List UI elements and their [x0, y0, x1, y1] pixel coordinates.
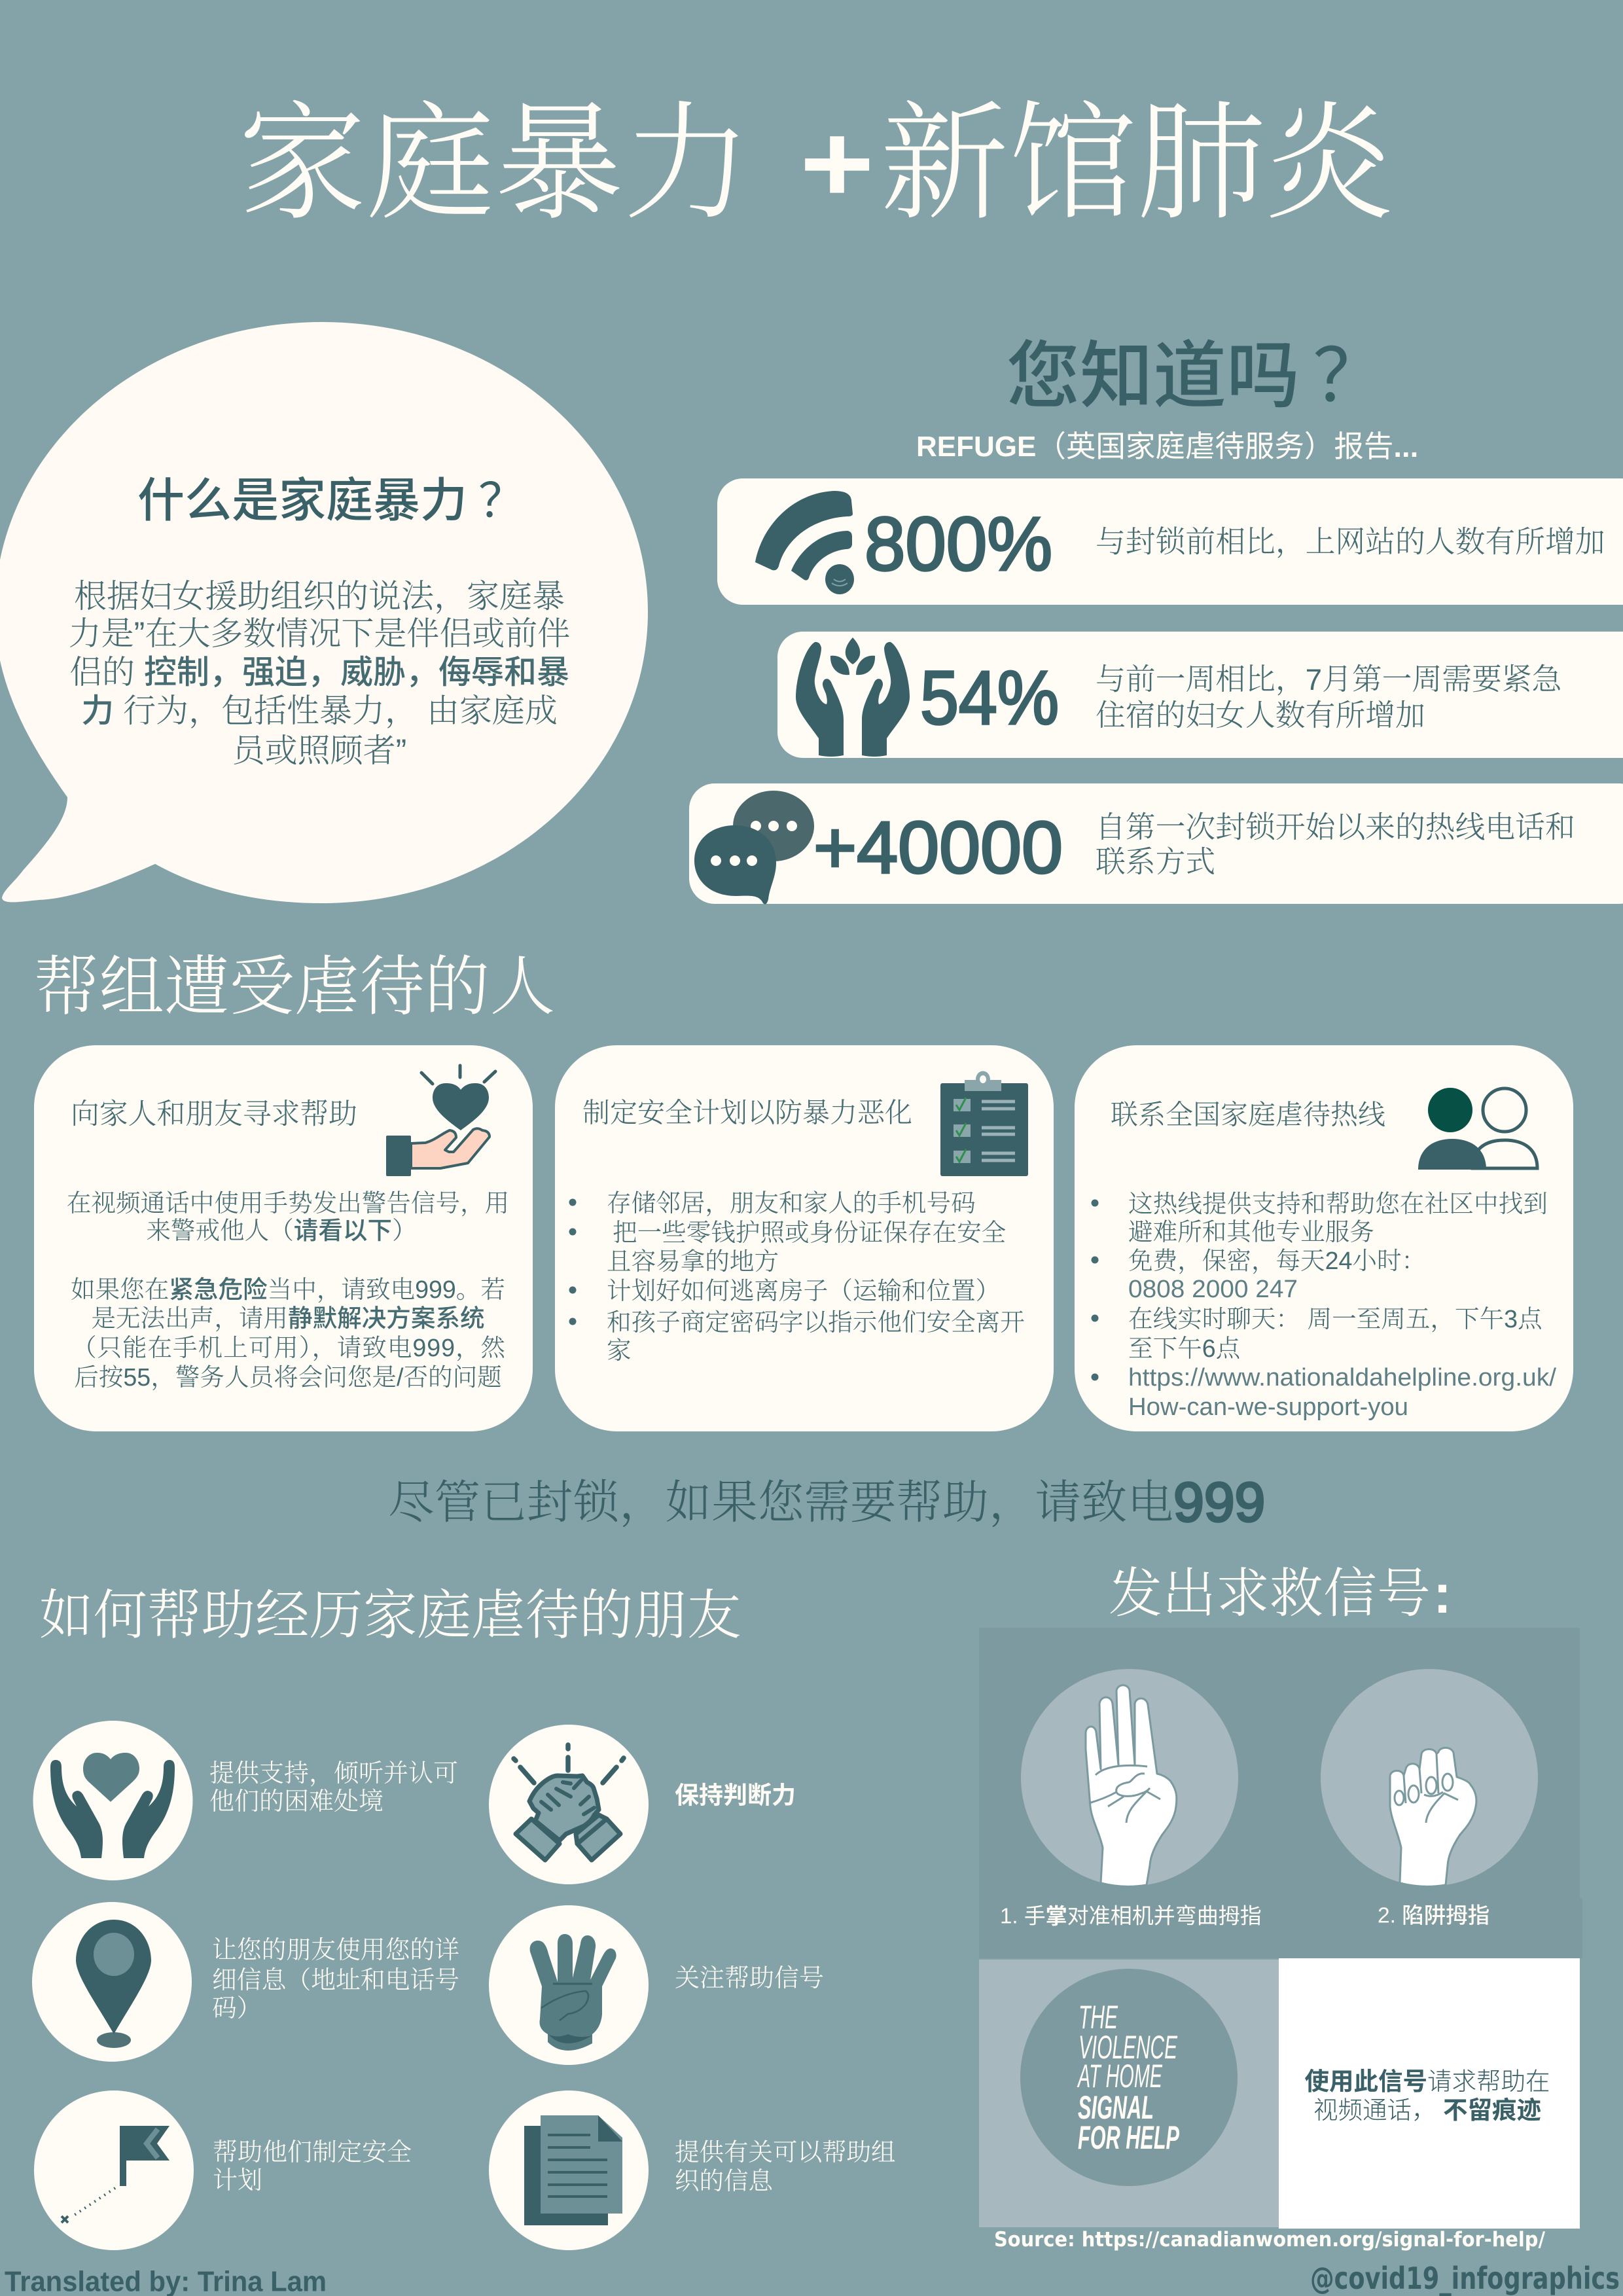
card body: 如果您在紧急危险当中，请致电999。若: [71, 1276, 505, 1304]
icon: location pin: [32, 1902, 192, 2062]
text: 帮助他们制定安全: [213, 2139, 412, 2166]
number: 800%: [865, 501, 1052, 586]
text: 织的信息: [675, 2167, 773, 2195]
logo: violence at home signal for help: [1020, 1969, 1238, 2186]
stat: 800%: [717, 478, 1623, 605]
bubble body text: [69, 578, 570, 769]
card title: 联系全国家庭虐待热线: [1111, 1100, 1385, 1130]
panel: signal for help: [979, 1628, 1582, 2229]
item: provide information: [489, 2090, 895, 2250]
card bullets: 至下午6点: [1128, 1335, 1241, 1362]
item: keep judgement: [489, 1725, 796, 1884]
bubble heading: 什么是家庭暴力？: [137, 462, 526, 530]
heading: did you know: 您知道吗？: [1007, 317, 1386, 423]
step 2 label: 2. 陷阱拇指: [1378, 1903, 1489, 1928]
card bullets: 家: [607, 1336, 632, 1364]
item: watch for help signal: [489, 1905, 824, 2065]
icon: chat bubbles: [694, 791, 814, 905]
card body: 后按55，警务人员将会问您是/否的问题: [74, 1363, 502, 1391]
card bullets: 0808 2000 247: [1128, 1275, 1298, 1302]
title: 家庭暴力: [238, 92, 751, 236]
signal explanation text: [1305, 2068, 1550, 2124]
icon: documents: [489, 2090, 649, 2250]
bubble body text: 根据妇女援助组织的说法，家庭暴: [74, 578, 565, 615]
signal explanation text: 使用此信号请求帮助在: [1305, 2068, 1550, 2095]
text: 细信息（地址和电话号: [212, 1967, 459, 1994]
card bullets: 存储邻居，朋友和家人的手机号码: [607, 1189, 976, 1217]
text: [212, 1937, 459, 2022]
icon: heart in hand: [386, 1066, 495, 1176]
card body: （只能在手机上可用），请致电999，然: [72, 1334, 505, 1362]
logo: violence at home signal for help: THE: [1079, 1999, 1118, 2036]
text: 提供有关可以帮助组: [675, 2138, 895, 2166]
card bullets: 在线实时聊天： 周一至周五，下午3点: [1128, 1305, 1543, 1333]
card: make a safety plan: [555, 1045, 1054, 1431]
speech bubble: what is domestic violence: [0, 322, 648, 903]
description: [1096, 810, 1575, 878]
signal explanation text: 视频通话， 不留痕迹: [1313, 2096, 1541, 2124]
step 2: thumb trapped in fist: [1321, 1669, 1538, 1886]
item: share your details: [32, 1902, 459, 2062]
title: +: [800, 101, 874, 226]
icon: hands with heart: [33, 1721, 192, 1880]
icon: four-finger hand: [489, 1905, 649, 2065]
item: offer support: [33, 1721, 458, 1880]
description: [1096, 662, 1562, 732]
logo: violence at home signal for help: FOR HELP: [1078, 2119, 1179, 2156]
card body: [67, 1189, 509, 1391]
bubble body text: 力 行为，包括性暴力， 由家庭成: [81, 692, 558, 729]
title: 新馆肺炎: [880, 92, 1393, 236]
number: +40000: [813, 806, 1063, 889]
card bullets: 计划好如何逃离房子（运输和位置）: [607, 1277, 1000, 1304]
logo: violence at home signal for help: AT HOME: [1077, 2058, 1162, 2094]
icon: two people: [1418, 1088, 1537, 1170]
icon: clipboard checklist: [940, 1071, 1028, 1176]
text: [209, 1760, 458, 1816]
bubble shape: [0, 322, 648, 903]
card bullets: How-can-we-support-you: [1128, 1393, 1408, 1420]
icon: hands holding plant: [796, 637, 910, 757]
logo: violence at home signal for help: VIOLENCE: [1079, 2029, 1177, 2066]
card bullets: 和孩子商定密码字以指示他们安全离开: [607, 1308, 1025, 1336]
number: 54%: [920, 655, 1059, 740]
icon: wifi: [755, 491, 854, 594]
heading: send help signal: 发出求救信号: [1109, 1564, 1431, 1623]
description: 与前一周相比，7月第一周需要紧急: [1096, 662, 1562, 696]
item: make a safety plan: [34, 2090, 412, 2250]
card bullets: [569, 1189, 1025, 1364]
subheading: Refuge reports: REFUGE（英国家庭虐待服务）报告...: [916, 429, 1418, 463]
text: 码）: [212, 1995, 262, 2022]
step 1: hand with thumb tucked: [1021, 1669, 1238, 1886]
card bullets: 避难所和其他专业服务: [1128, 1218, 1374, 1246]
text: 提供支持，倾听并认可: [209, 1760, 458, 1787]
icon: flag with dotted route: [34, 2090, 194, 2250]
card body: 是无法出声，请用静默解决方案系统: [91, 1304, 485, 1333]
bubble body text: 侣的 控制，强迫，威胁，侮辱和暴: [69, 654, 569, 691]
card: seek help from family and friends: [34, 1045, 533, 1431]
card bullets: [1092, 1190, 1557, 1420]
card bullets: 把一些零钱护照或身份证保存在安全: [613, 1219, 1006, 1246]
heading: send help signal: :: [1433, 1563, 1452, 1624]
bubble body text: 力是”在大多数情况下是伴侣或前伴: [69, 615, 570, 652]
logo: violence at home signal for help: SIGNAL: [1078, 2089, 1154, 2126]
heading: help those abused: 帮组遭受虐待的人: [34, 950, 555, 1024]
text: 他们的困难处境: [209, 1788, 383, 1816]
description: 住宿的妇女人数有所增加: [1096, 699, 1425, 732]
card bullets: 且容易拿的地方: [607, 1247, 779, 1275]
card bullets: 免费，保密，每天24小时：: [1128, 1247, 1426, 1275]
card body: 在视频通话中使用手势发出警告信号，用: [67, 1189, 509, 1217]
text: 计划: [213, 2167, 262, 2195]
icon: clasped hands: [489, 1725, 649, 1884]
banner: call 999: 尽管已封锁，如果您需要帮助，请致电999: [388, 1471, 1265, 1533]
card bullets: 这热线提供支持和帮助您在社区中找到: [1128, 1190, 1548, 1217]
card title: 制定安全计划以防暴力恶化: [582, 1097, 912, 1128]
description: 自第一次封锁开始以来的热线电话和: [1096, 810, 1575, 844]
card bullets: https://www.nationaldahelpline.org.uk/: [1128, 1363, 1557, 1391]
text: [213, 2139, 412, 2195]
text: 保持判断力: [675, 1782, 796, 1809]
stat: +40000: [689, 783, 1623, 905]
card: contact national helpline: [1075, 1045, 1573, 1431]
card body: 来警戒他人（请看以下）: [146, 1217, 417, 1244]
text: 让您的朋友使用您的详: [212, 1937, 459, 1964]
description: 与封锁前相比，上网站的人数有所增加: [1096, 525, 1605, 559]
stat: 54%: [777, 632, 1623, 758]
step 1 label: 1. 手掌对准相机并弯曲拇指: [1000, 1903, 1262, 1928]
text: 关注帮助信号: [675, 1965, 824, 1992]
card title: 向家人和朋友寻求帮助: [71, 1098, 357, 1130]
heading: how to help a friend: 如何帮助经历家庭虐待的朋友: [39, 1585, 741, 1645]
description: 联系方式: [1096, 846, 1215, 878]
text: [675, 2138, 895, 2195]
bubble body text: 员或照顾者”: [232, 732, 406, 769]
source line: Source: https://canadianwomen.org/signal-for-help/: [994, 2228, 1546, 2251]
title: [238, 92, 1393, 236]
